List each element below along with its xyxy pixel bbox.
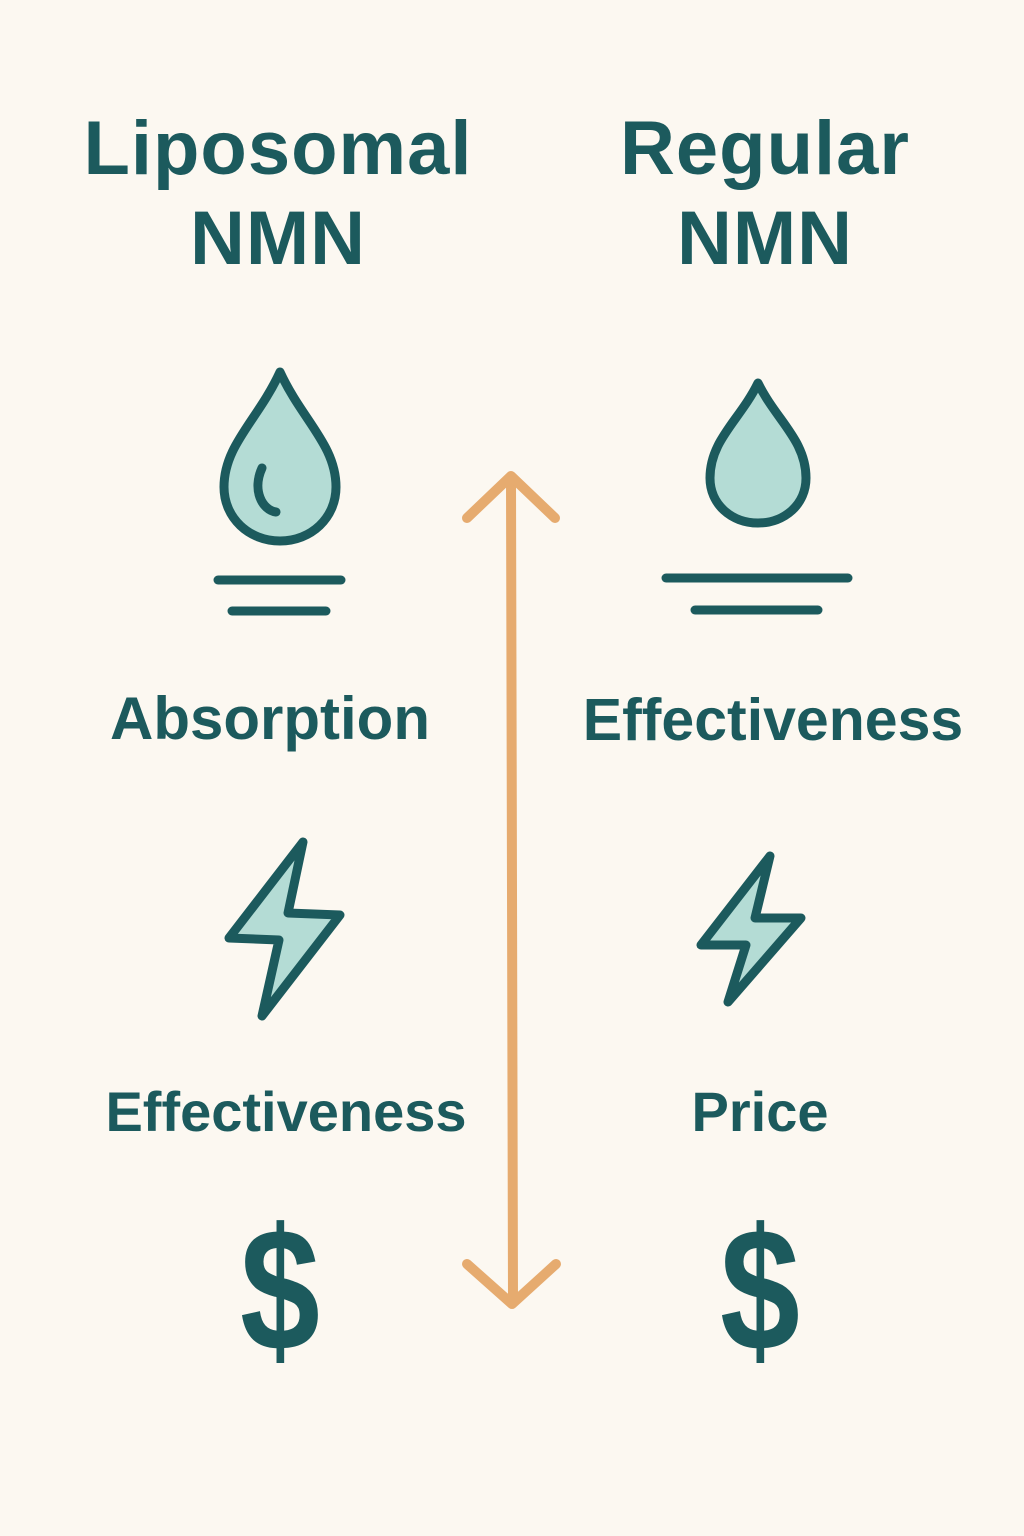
- title: regular NMN: Regular: [620, 106, 910, 191]
- arrow: double-headed vertical: [467, 476, 556, 1304]
- icon: left water drop: [218, 372, 341, 611]
- icon: left lightning bolt: [229, 842, 340, 1016]
- title: liposomal NMN: [83, 106, 473, 281]
- label: effectiveness right: Effectiveness: [583, 687, 963, 753]
- icon: right water drop: [666, 383, 848, 610]
- label: absorption: Absorption: [110, 685, 430, 752]
- icon: right dollar: $: [720, 1193, 800, 1388]
- icon: left dollar: $: [240, 1193, 320, 1388]
- title: regular NMN: NMN: [677, 196, 853, 281]
- label: price: Price: [692, 1080, 828, 1143]
- title: liposomal NMN: Liposomal: [83, 106, 473, 191]
- icon: right lightning bolt: [701, 856, 801, 1002]
- title: liposomal NMN: NMN: [190, 196, 366, 281]
- title: regular NMN: [620, 106, 910, 281]
- label: effectiveness left: Effectiveness: [105, 1080, 467, 1143]
